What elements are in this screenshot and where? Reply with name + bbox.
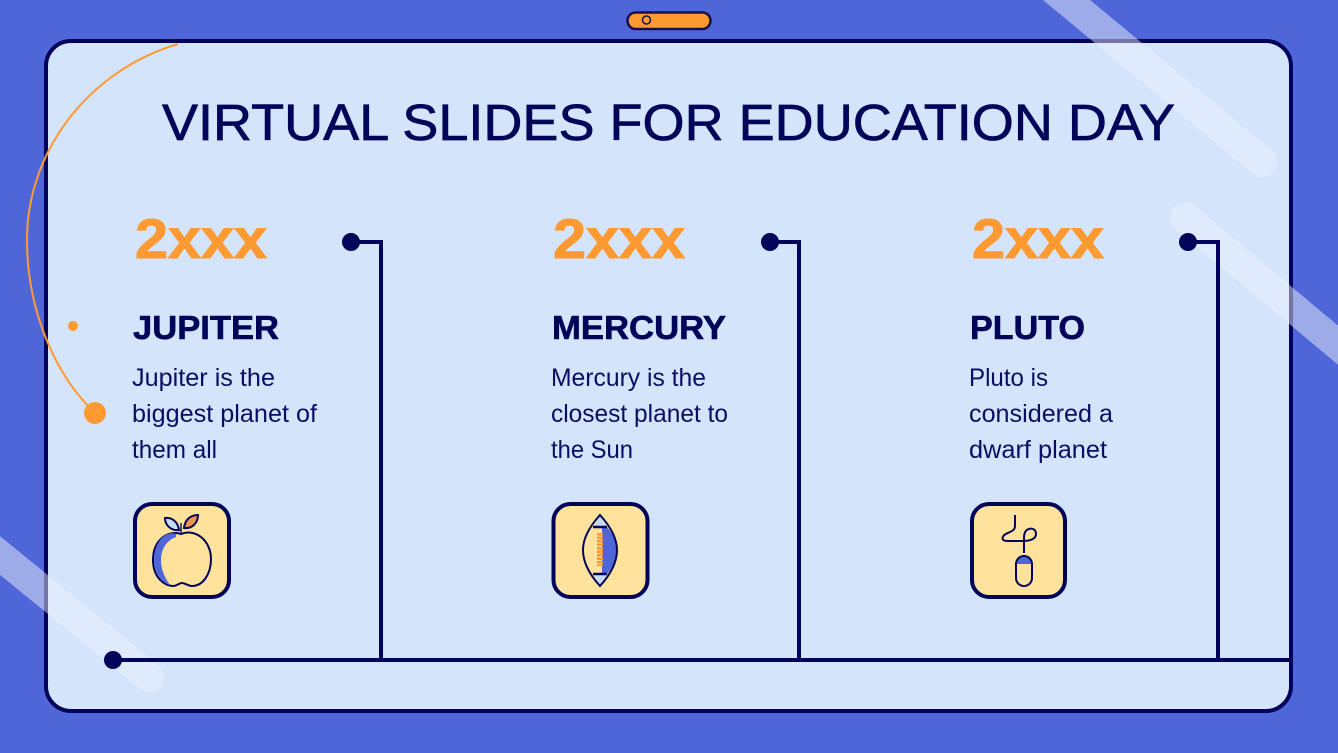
icon: apple xyxy=(135,504,229,597)
description: Pluto is xyxy=(969,364,1048,392)
column: Mercury xyxy=(551,207,728,597)
year: 2xxx xyxy=(553,207,685,270)
description xyxy=(969,364,1113,464)
icon: football xyxy=(554,504,648,597)
title: VIRTUAL SLIDES FOR EDUCATION DAY xyxy=(162,94,1175,151)
year: 2xxx xyxy=(135,207,267,270)
description: biggest planet of xyxy=(132,400,317,428)
description: Jupiter is the xyxy=(132,364,275,392)
description: them all xyxy=(132,436,217,464)
column: Jupiter xyxy=(132,207,317,597)
description xyxy=(551,364,728,464)
description: the Sun xyxy=(551,436,633,464)
description xyxy=(132,364,317,464)
description: closest planet to xyxy=(551,400,728,428)
year: 2xxx xyxy=(972,207,1104,270)
icon: computer mouse xyxy=(972,504,1065,597)
decorative orange arc with dots xyxy=(27,44,178,424)
description: considered a xyxy=(969,400,1113,428)
column: Pluto xyxy=(969,207,1113,597)
description: Mercury is the xyxy=(551,364,706,392)
device camera pill xyxy=(628,12,710,29)
timeline with connectors xyxy=(104,233,1291,669)
heading: JUPITER xyxy=(133,309,279,346)
heading: MERCURY xyxy=(552,309,726,346)
description: dwarf planet xyxy=(969,436,1107,464)
heading: PLUTO xyxy=(970,309,1085,346)
